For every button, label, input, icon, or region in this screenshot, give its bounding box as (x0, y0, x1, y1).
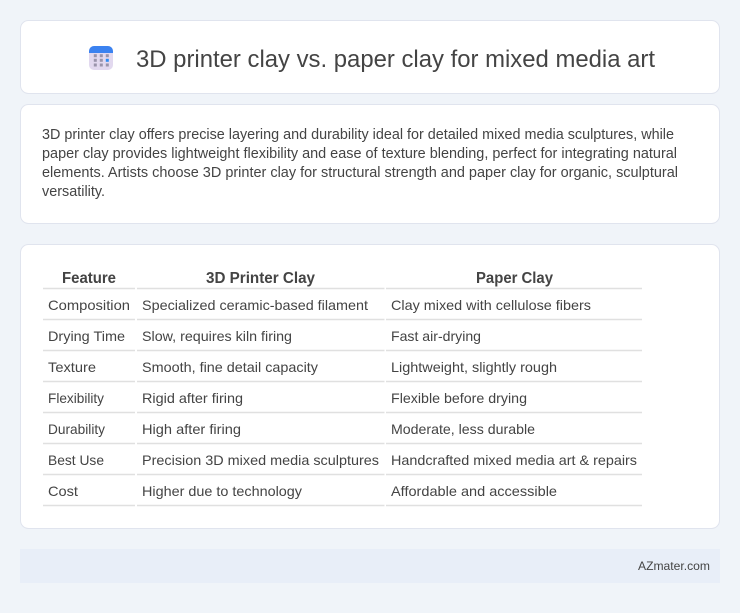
row: cost: Higher due to technology (142, 483, 302, 499)
row: flexibility: Flexible before drying (391, 390, 527, 406)
panel: intro (20, 104, 720, 224)
row: durability: Moderate, less durable (391, 421, 535, 437)
row: cost (48, 483, 557, 499)
row: composition: Composition (48, 297, 130, 313)
row: texture: Lightweight, slightly rough (391, 359, 557, 375)
intro text (42, 127, 678, 200)
row: texture: Smooth, fine detail capacity (142, 359, 318, 375)
footer (20, 549, 720, 583)
row: composition (48, 297, 591, 313)
row: drying time: Slow, requires kiln firing (142, 328, 292, 344)
row: cost: Affordable and accessible (391, 483, 557, 499)
row: flexibility: Rigid after firing (142, 390, 243, 406)
footer text: AZmater.com (638, 559, 710, 573)
row: best use (48, 452, 637, 468)
table header: Paper Clay (476, 270, 553, 287)
row: drying time: Drying Time (48, 328, 125, 344)
row: cost: Cost (48, 483, 78, 499)
row: drying time (48, 328, 481, 344)
intro text: elements. Artists choose 3D printer clay for structural strength and paper clay for organic, sculptural (42, 165, 678, 181)
row: flexibility: Flexibility (48, 390, 104, 406)
table header: Feature (62, 270, 116, 287)
intro text: 3D printer clay offers precise layering and durability ideal for detailed mixed media sculptures, while (42, 127, 674, 143)
row: texture: Texture (48, 359, 96, 375)
row: drying time: Fast air-drying (391, 328, 481, 344)
row: best use: Handcrafted mixed media art & repairs (391, 452, 637, 468)
table header: 3D Printer Clay (206, 270, 315, 287)
row: durability: High after firing (142, 421, 241, 437)
row: durability: Durability (48, 421, 105, 437)
row: best use: Precision 3D mixed media sculptures (142, 452, 379, 468)
intro text: versatility. (42, 184, 105, 200)
row: composition: Clay mixed with cellulose fibers (391, 297, 591, 313)
intro text: paper clay provides lightweight flexibility and ease of texture blending, perfect for integrating natural (42, 146, 677, 162)
row: best use: Best Use (48, 452, 104, 468)
row: texture (48, 359, 557, 375)
row: composition: Specialized ceramic-based filament (142, 297, 368, 313)
icon: calendar (89, 46, 113, 70)
table header (62, 270, 553, 287)
row: durability (48, 421, 535, 437)
panel: comparison table (20, 244, 720, 528)
row: flexibility (48, 390, 527, 406)
panel: title (20, 20, 720, 94)
title text: 3D printer clay vs. paper clay for mixed media art (136, 46, 655, 73)
